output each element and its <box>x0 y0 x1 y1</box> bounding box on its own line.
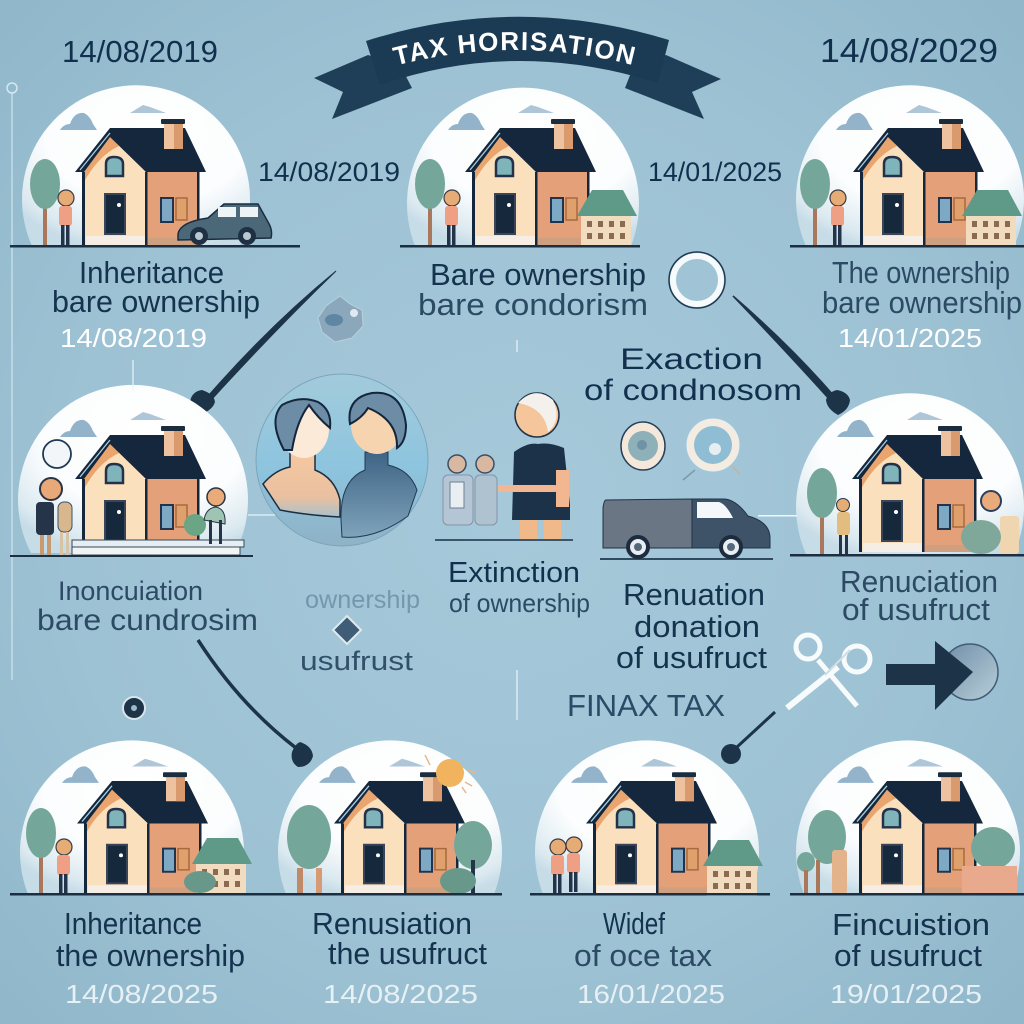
arrow: to final tax house <box>721 712 775 764</box>
label: renunciation the usufruct: Renusiation <box>312 906 472 941</box>
faint label: ownership usufruct <box>300 586 420 676</box>
label: finculistion of usufruct: Fincuistion <box>832 907 990 942</box>
heading: extinction of condominium <box>584 343 802 407</box>
icon: small gem <box>318 296 363 342</box>
label: renunciation the usufruct: the usufruct <box>328 936 487 971</box>
label: bare condominium: Inoncuiation <box>58 576 203 606</box>
icon: arrow with circle <box>886 641 998 710</box>
label: bare ownership condominium: bare condorism <box>418 287 648 322</box>
label: renunciation of usufruct <box>840 564 998 627</box>
date: 14/01/2025 <box>838 323 982 353</box>
heading: extinction of condominium: Exaction <box>620 343 763 376</box>
label: inheritance bare ownership: Inheritance <box>79 255 224 290</box>
label: inherite the ownership: the ownership <box>56 938 245 973</box>
arrow: to middle left house <box>190 271 336 415</box>
heading: final tax: FINAX TAX <box>567 688 725 723</box>
left timeline rule <box>7 83 17 680</box>
label: renunciation donation: of usufruct <box>616 640 767 675</box>
banner title <box>314 16 721 119</box>
label: finculistion of usufruct <box>832 907 990 973</box>
label: widef of tax <box>574 906 713 973</box>
label: bare condominium <box>37 576 258 637</box>
date: 16/01/2025 <box>577 979 725 1009</box>
label: finculistion of usufruct: of usufruct <box>834 938 982 973</box>
date: 14/08/2019 <box>60 323 207 353</box>
label: bare condominium: bare cundrosim <box>37 604 258 637</box>
icon: small target <box>123 697 145 719</box>
label: renunciation the usufruct <box>312 906 487 971</box>
label: renunciation donation: donation <box>634 609 760 644</box>
label: renunciation donation: Renuation <box>623 577 765 612</box>
panel: row 3 house 4 <box>790 740 1024 896</box>
illustration: adult with children <box>435 393 573 541</box>
panel: row 3 house 2 <box>262 740 502 896</box>
label: extinction of ownership: of ownership <box>449 588 590 618</box>
icon: round seal left <box>621 422 665 470</box>
panel: row 3 house 3 <box>530 740 770 896</box>
panel: row 2 right house <box>790 393 1024 556</box>
connector lines <box>133 340 517 720</box>
label: the ownership <box>822 255 1022 320</box>
icon: delivery van <box>600 499 797 560</box>
date middle right: 14/01/2025 <box>648 157 782 187</box>
date: 14/08/2025 <box>323 979 478 1009</box>
label: inheritance bare ownership: bare ownership <box>52 284 260 319</box>
panel: row 1 house 3 <box>790 85 1024 247</box>
label: inherite the ownership <box>56 906 245 973</box>
icon: magnifier small <box>683 419 740 480</box>
label: extinction of ownership <box>448 557 590 618</box>
date: 19/01/2025 <box>830 979 982 1009</box>
arrow: to middle right house <box>733 296 850 415</box>
label: bare ownership condominium <box>418 257 648 322</box>
label: widef of tax: Widef <box>603 906 665 941</box>
faint label: ownership usufruct: ownership <box>305 586 420 614</box>
date top left: 14/08/2019 <box>62 34 218 69</box>
label: inheritance bare ownership <box>52 255 260 319</box>
panel: row 2 left house <box>10 385 253 557</box>
date middle left: 14/08/2019 <box>258 157 400 187</box>
faint label: ownership usufruct: usufrust <box>300 646 414 676</box>
label: widef of tax: of oce tax <box>574 938 713 973</box>
panel: row 3 house 1 <box>10 740 262 896</box>
panel: row 1 house 1 <box>10 85 300 248</box>
label: bare ownership condominium: Bare ownership <box>430 257 646 292</box>
label: inherite the ownership: Inheritance <box>64 906 202 941</box>
heading: extinction of condominium: of condnosom <box>584 374 802 407</box>
portrait: two people <box>256 374 428 546</box>
banner title: TAX HORISATION <box>392 32 636 65</box>
label: extinction of ownership: Extinction <box>448 557 580 589</box>
panel: row 1 house 2 <box>400 88 640 248</box>
icon: scissors <box>787 635 870 708</box>
date top right: 14/08/2029 <box>820 32 998 69</box>
arrow: left down <box>198 640 313 767</box>
label: renunciation of usufruct: Renuciation <box>840 564 998 599</box>
date: 14/08/2025 <box>65 979 218 1009</box>
label: renunciation donation <box>616 577 767 675</box>
icon: magnifier <box>669 252 725 308</box>
label: renunciation of usufruct: of usufruct <box>842 592 990 627</box>
